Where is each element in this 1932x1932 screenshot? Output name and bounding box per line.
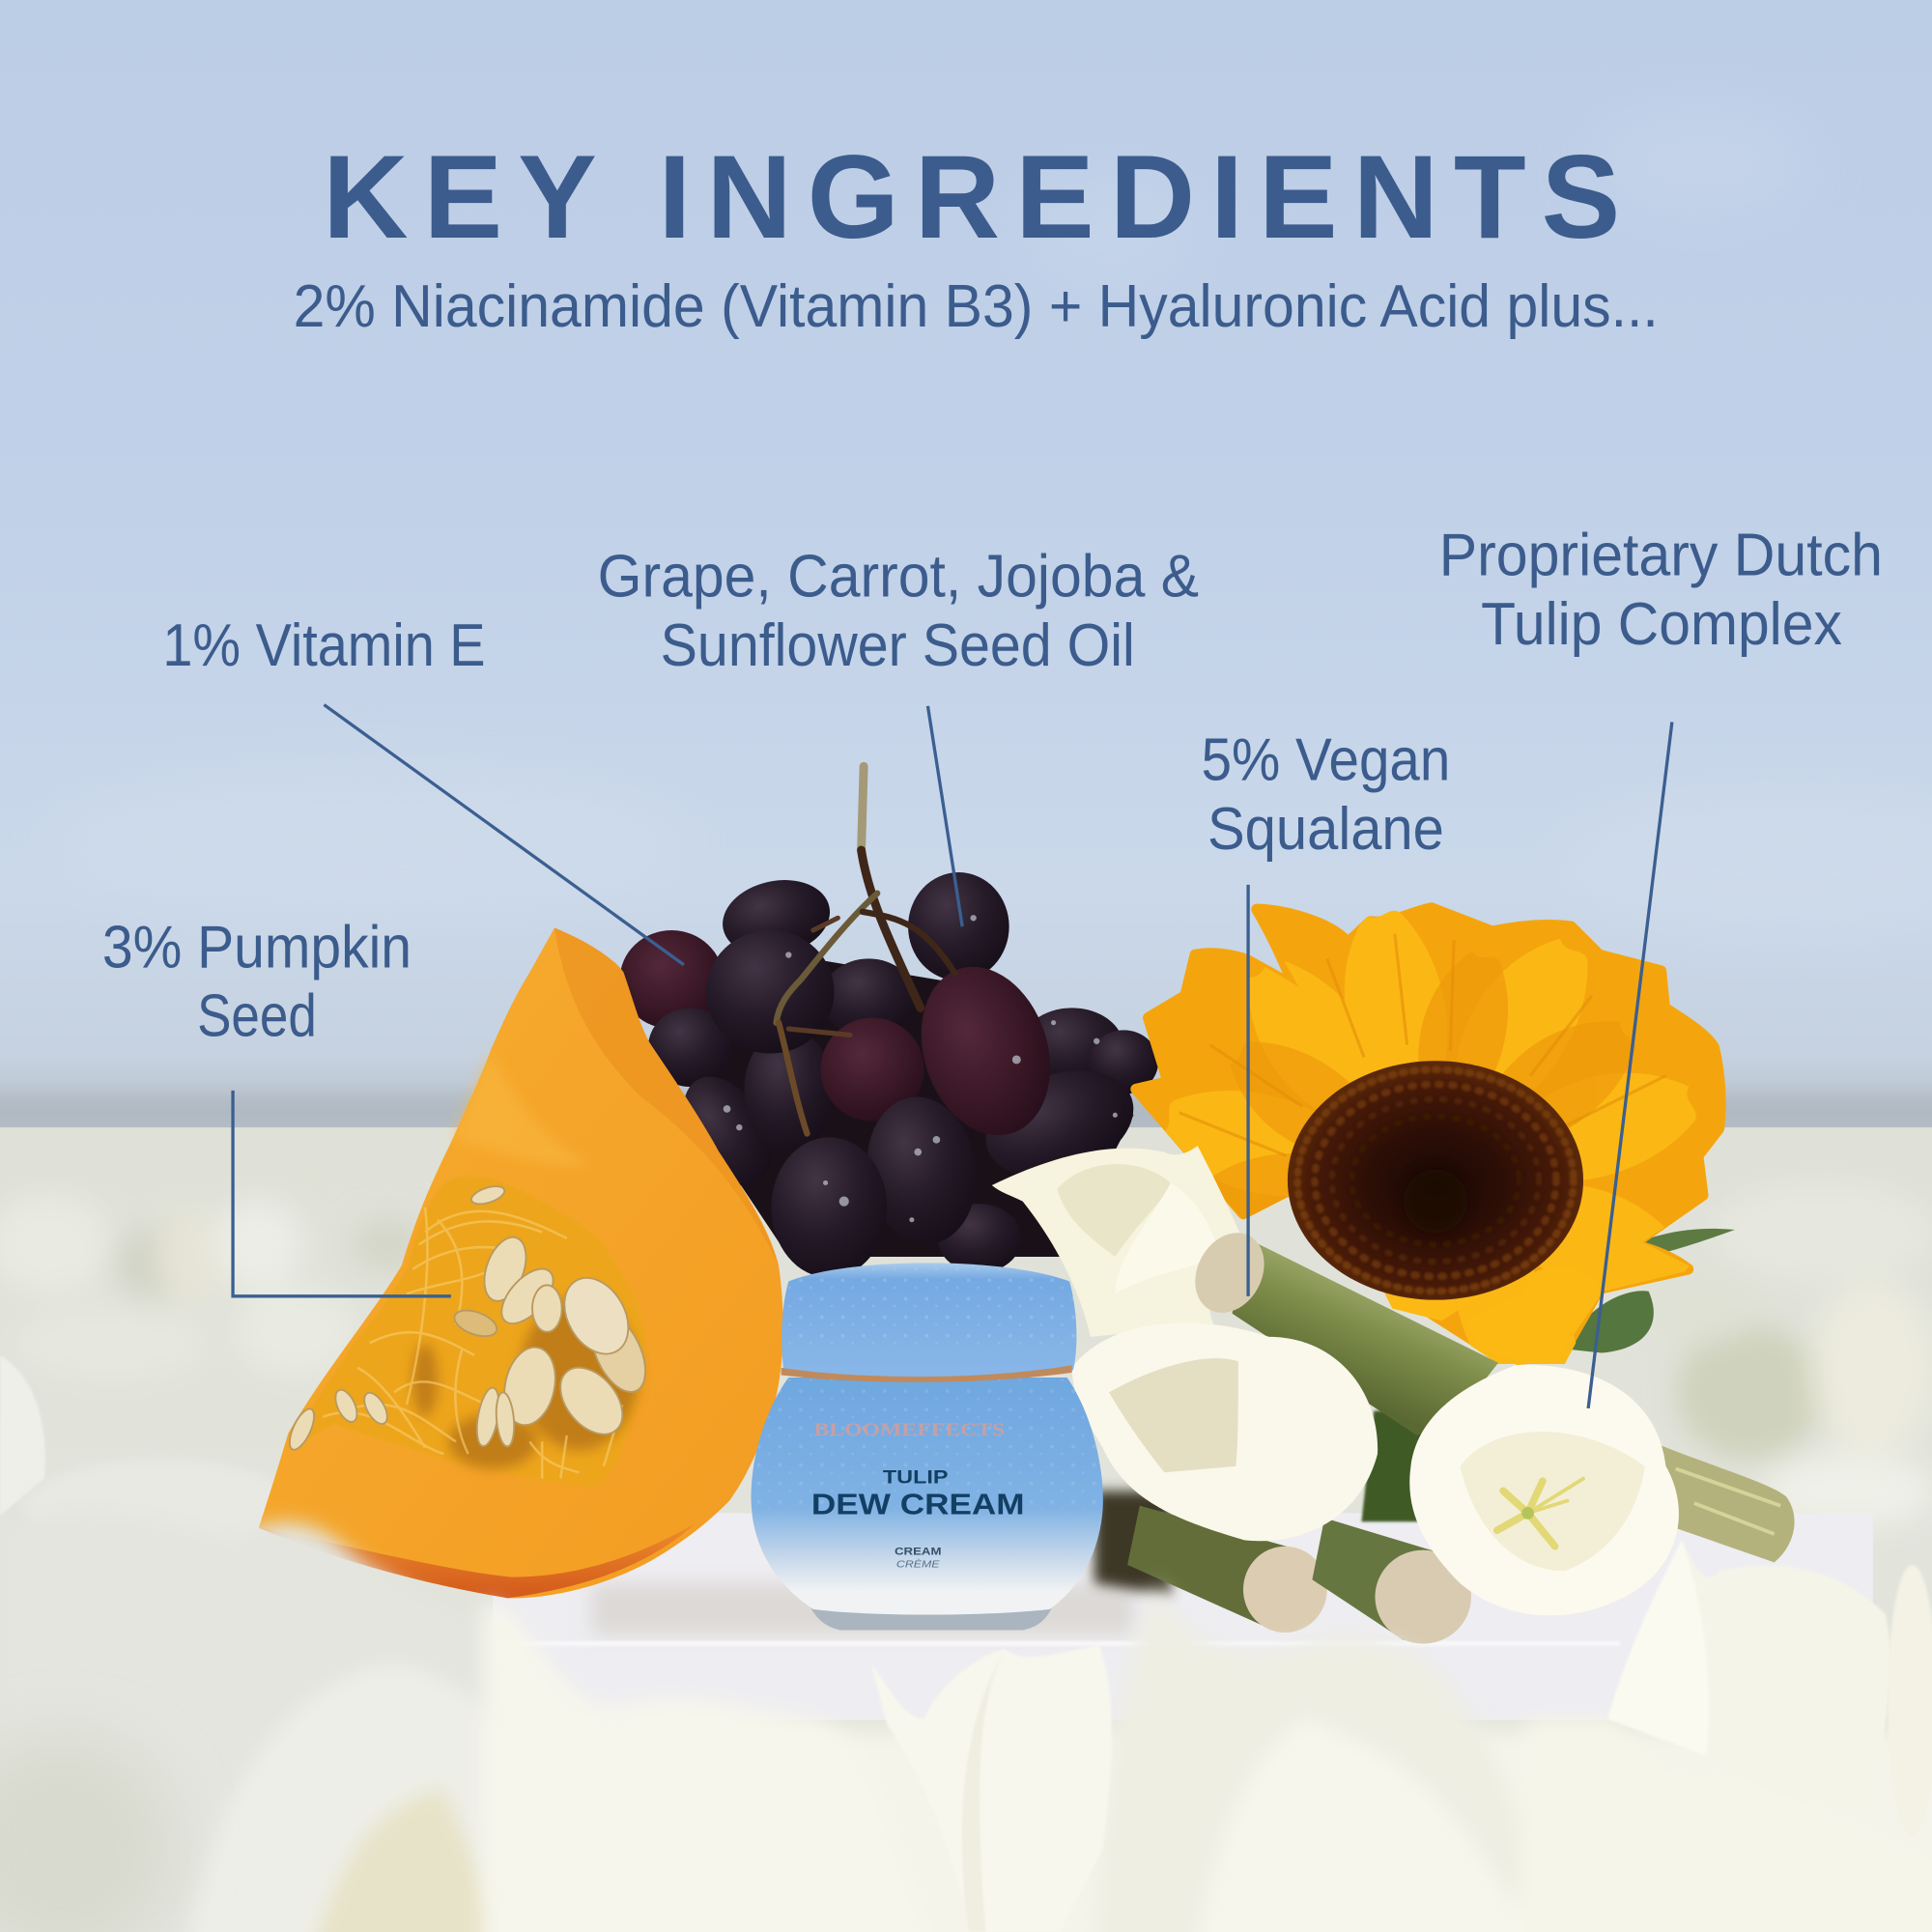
leader line: seed oil xyxy=(927,706,962,926)
background: soft clouds xyxy=(49,104,1932,936)
pumpkin rind xyxy=(259,1523,696,1598)
inner petals xyxy=(1165,910,1696,1364)
label: Grape, Carrot, Jojoba and Sunflower Seed Oil: Grape, Carrot, Jojoba & xyxy=(598,542,1199,610)
jar format label french: CRÈME xyxy=(896,1557,940,1570)
green stems xyxy=(1094,1410,1795,1596)
tulip stamens xyxy=(1497,1479,1583,1547)
jar body droplets xyxy=(752,1378,1103,1509)
background: tulip field xyxy=(0,1127,1932,1932)
jar body xyxy=(752,1378,1103,1615)
stem: right background xyxy=(1658,1444,1795,1562)
background: sky xyxy=(0,0,1932,1133)
lid droplets xyxy=(781,1263,1077,1350)
white tulips xyxy=(992,1146,1679,1644)
foreground small sharp tulip xyxy=(871,1645,1112,1932)
tulip: right xyxy=(1409,1365,1679,1615)
label: 5% Vegan Squalane xyxy=(1202,725,1450,863)
pumpkin seeds xyxy=(285,1182,656,1453)
tulip: upper left xyxy=(992,1146,1244,1337)
seed disc xyxy=(1288,1061,1583,1300)
jar product title: DEW CREAM xyxy=(811,1489,1025,1521)
jar lid xyxy=(781,1263,1076,1379)
grape stems xyxy=(777,766,955,1133)
label: 5% Vegan Squalane: Squalane xyxy=(1208,795,1444,863)
label: Proprietary Dutch Tulip Complex: Tulip Complex xyxy=(1481,590,1842,658)
grape bunch xyxy=(620,766,1158,1278)
stem: lower right cut xyxy=(1312,1518,1471,1644)
label: 3% Pumpkin Seed xyxy=(102,913,412,1050)
white tray xyxy=(493,1513,1873,1720)
subtitle: 2% Niacinamide (Vitamin B3) + Hyaluronic Acid plus... xyxy=(294,272,1659,340)
gold band xyxy=(781,1365,1072,1382)
sunflower leaves xyxy=(1567,1229,1735,1353)
label: Grape, Carrot, Jojoba and Sunflower Seed Oil xyxy=(598,542,1199,679)
dark seed hollows xyxy=(412,1297,639,1468)
label: Proprietary Dutch Tulip Complex xyxy=(1439,522,1883,658)
label: 3% Pumpkin Seed: Seed xyxy=(197,982,317,1050)
pumpkin ridge shading xyxy=(554,927,779,1265)
pumpkin fibres xyxy=(323,1208,622,1479)
foreground blurred tulips xyxy=(0,1512,1932,1932)
foreground left mass xyxy=(0,1512,591,1932)
jar product name: TULIP xyxy=(883,1468,949,1489)
jar brand text: BLOOMEFFECTS xyxy=(813,1420,1005,1440)
leader line: tulip complex xyxy=(1588,722,1672,1408)
leader line: vitamin E xyxy=(324,705,684,965)
label: 3% Pumpkin Seed: 3% Pumpkin xyxy=(102,913,412,980)
label: 1% Vitamin E: 1% Vitamin E xyxy=(162,611,486,679)
foreground sharp tulip right xyxy=(1608,1540,1890,1811)
leader line: pumpkin seed xyxy=(233,1091,451,1296)
water droplets xyxy=(724,915,1118,1222)
leader line: squalane xyxy=(1247,885,1249,1296)
pumpkin slice xyxy=(259,927,783,1598)
product jar xyxy=(752,1263,1103,1631)
lower petals xyxy=(1381,1266,1602,1365)
tulip: centre xyxy=(1072,1322,1378,1541)
background: left blurred tulips xyxy=(0,1355,296,1559)
label: Grape, Carrot, Jojoba and Sunflower Seed Oil: Sunflower Seed Oil xyxy=(661,611,1135,679)
label: Proprietary Dutch Tulip Complex: Proprietary Dutch xyxy=(1439,522,1883,589)
pumpkin cavity xyxy=(291,1176,645,1486)
title: KEY INGREDIENTS xyxy=(323,130,1620,263)
stem: lower left cut xyxy=(1127,1506,1327,1633)
jar format label: CREAM xyxy=(895,1547,941,1558)
background: horizon band xyxy=(0,1096,1932,1127)
petal silhouette xyxy=(1136,908,1720,1358)
label: 5% Vegan Squalane: 5% Vegan xyxy=(1202,725,1450,793)
jar glass base xyxy=(806,1597,1056,1631)
sunflower xyxy=(1130,902,1735,1366)
foreground centre mass xyxy=(483,1583,1932,1932)
stem: long diagonal xyxy=(1181,1221,1498,1435)
foreground cream base xyxy=(456,1731,1932,1932)
shadowed foliage behind stems xyxy=(1094,1410,1430,1596)
